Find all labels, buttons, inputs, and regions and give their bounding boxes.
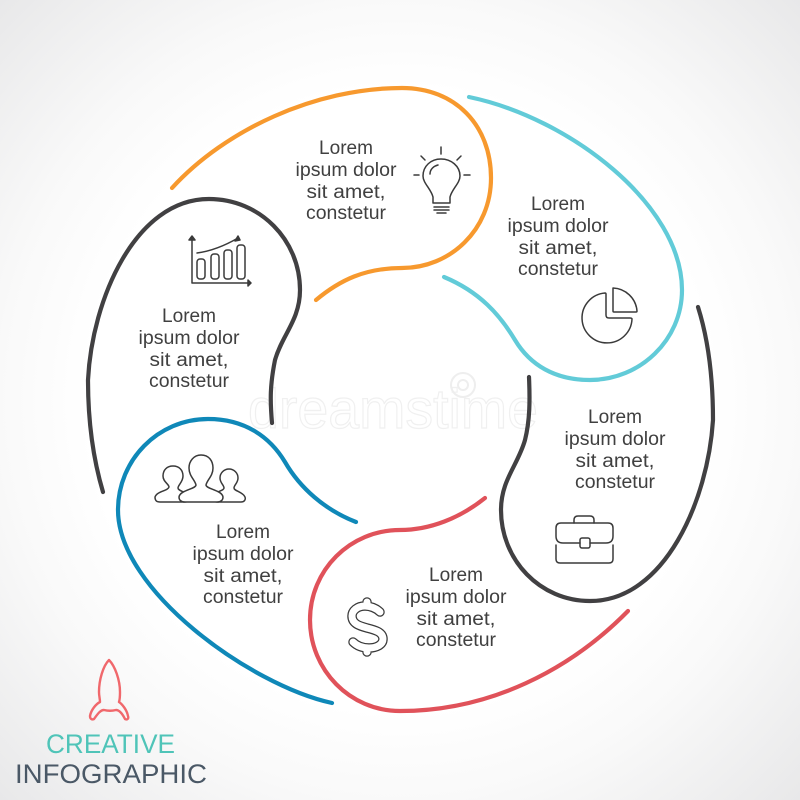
- title: creative: CREATIVE: [46, 729, 175, 759]
- curve: dark right segment: [501, 307, 713, 601]
- text: blue segment: Lorem: [216, 522, 270, 543]
- curve: orange segment: [172, 88, 491, 300]
- text: blue segment: sit amet,: [204, 566, 282, 587]
- text: red segment: Lorem: [429, 565, 483, 586]
- watermark: dreamstime: [248, 377, 538, 440]
- icon: light bulb: [414, 147, 470, 213]
- text: red segment: sit amet,: [416, 609, 496, 630]
- curve: red segment: [310, 498, 628, 711]
- text: dark right segment: ipsum dolor: [564, 429, 666, 450]
- icon: rocket: [90, 660, 128, 719]
- curve: blue segment: [118, 419, 356, 703]
- text: red segment: [406, 565, 507, 651]
- text: orange segment: ipsum dolor: [296, 160, 397, 181]
- icon: dollar sign: [352, 602, 383, 652]
- text: dark right segment: sit amet,: [576, 451, 654, 472]
- text: cyan segment: constetur: [518, 259, 599, 280]
- text: dark right segment: Lorem: [588, 407, 642, 428]
- text: dark right segment: constetur: [575, 472, 656, 493]
- text: dark left segment: Lorem: [162, 306, 216, 327]
- text: orange segment: [296, 138, 397, 224]
- text: cyan segment: [508, 194, 609, 280]
- title: infographic: INFOGRAPHIC: [15, 759, 207, 789]
- text: dark left segment: sit amet,: [150, 350, 228, 371]
- icon: briefcase: [556, 516, 613, 563]
- text: orange segment: Lorem: [319, 138, 373, 159]
- text: orange segment: constetur: [306, 203, 387, 224]
- text: dark right segment: [564, 407, 666, 493]
- curve: dark left segment: [88, 199, 300, 492]
- text: blue segment: constetur: [203, 587, 284, 608]
- curve: cyan segment: [444, 97, 682, 380]
- text: dark left segment: [138, 306, 240, 392]
- text: blue segment: ipsum dolor: [192, 544, 294, 565]
- text: red segment: constetur: [416, 630, 497, 651]
- text: cyan segment: sit amet,: [518, 238, 598, 259]
- icon: people group: [155, 455, 245, 502]
- icon: bar chart with arrow: [189, 236, 251, 286]
- text: red segment: ipsum dolor: [406, 587, 507, 608]
- text: blue segment: [192, 522, 294, 608]
- text: dark left segment: constetur: [149, 371, 230, 392]
- text: cyan segment: ipsum dolor: [508, 216, 609, 237]
- text: orange segment: sit amet,: [306, 182, 386, 203]
- text: dark left segment: ipsum dolor: [138, 328, 240, 349]
- text: cyan segment: Lorem: [531, 194, 585, 215]
- icon: pie chart: [582, 288, 637, 343]
